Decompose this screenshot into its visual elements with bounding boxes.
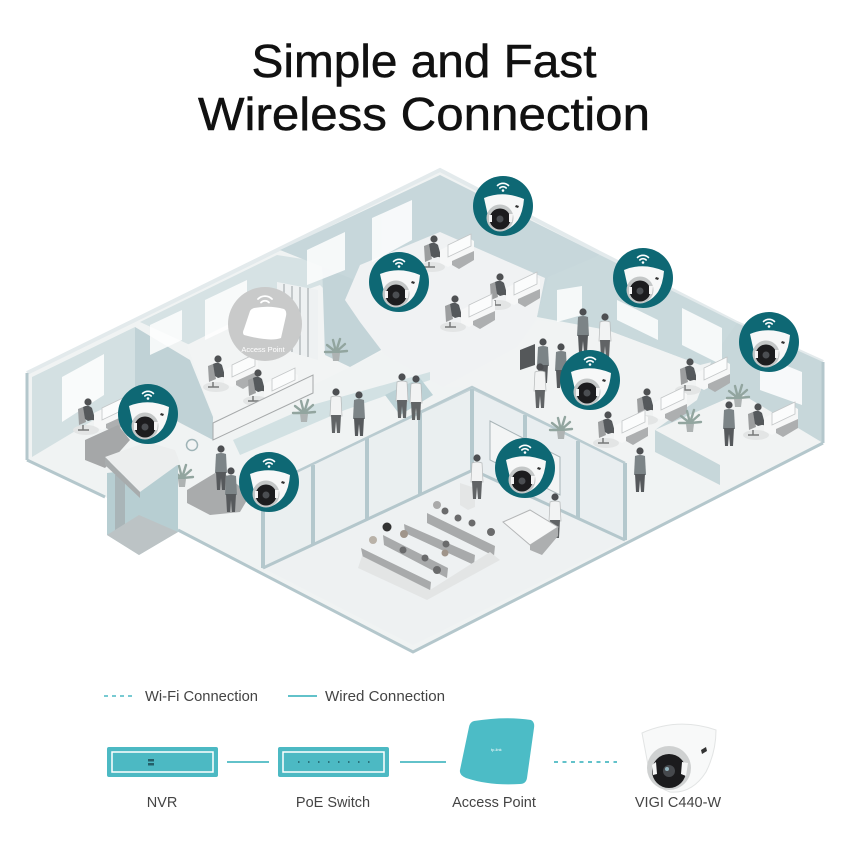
connector: [227, 761, 269, 763]
top room window right: [372, 200, 412, 262]
conference room top rail: [263, 387, 625, 488]
whiteboard: [557, 286, 582, 322]
network diagram: [107, 718, 721, 811]
device labels: NVR: [147, 795, 177, 811]
middle-right room back wall: [537, 255, 737, 365]
middle room workers: [675, 357, 730, 395]
right room floor: [655, 393, 821, 490]
group person 3: [577, 308, 589, 353]
device labels: Access Point: [452, 795, 536, 811]
group woman: [534, 363, 546, 408]
middle-right room floor: [443, 320, 700, 463]
access point device: [460, 718, 534, 784]
audience shadow: [358, 552, 500, 600]
plant: [171, 465, 193, 487]
plant: [550, 417, 572, 439]
elevator post: [115, 475, 125, 541]
person: [353, 391, 365, 436]
NVR: [107, 747, 218, 777]
bench row 3: [404, 524, 475, 565]
front desk with teacher: [503, 493, 561, 555]
room A partition wall: [135, 327, 213, 440]
elevator top side: [105, 457, 140, 498]
access point room floor: [187, 285, 385, 420]
walking man: [634, 447, 646, 492]
wall clock: [186, 440, 198, 450]
conference benches: [361, 513, 495, 592]
right room window: [760, 355, 802, 405]
device labels: PoE Switch: [296, 795, 370, 811]
outer floor edge: [27, 362, 823, 652]
AP label: Access Point: [241, 345, 286, 354]
right room seated worker: [743, 402, 798, 440]
camera badge 1: [473, 176, 533, 236]
middle room window far: [682, 308, 722, 365]
AP room workers: [203, 354, 258, 392]
isometric office floor plan: [27, 170, 823, 652]
elevator: [105, 442, 180, 555]
bench row 4: [427, 513, 495, 556]
left room manager: [73, 397, 128, 435]
corridor glass wall: [233, 372, 430, 455]
title: Simple and Fast: [252, 35, 597, 87]
conference whiteboard: [490, 421, 560, 495]
presenter: [471, 454, 483, 499]
PoE switch: [278, 747, 389, 777]
left room desk: [85, 425, 130, 468]
top room worker 2: [485, 272, 540, 310]
standing people: [330, 388, 342, 433]
left room window: [62, 354, 104, 422]
middle room window: [617, 300, 658, 340]
ap wifi waves: [258, 296, 272, 302]
conference room left wall: [263, 389, 473, 568]
camera badge 8: [495, 438, 555, 498]
elevator glass: [107, 465, 178, 555]
elevator top: [105, 442, 180, 492]
plant: [679, 410, 701, 432]
group person: [537, 338, 549, 383]
top room window left: [307, 232, 345, 285]
AP room worker 2: [243, 368, 298, 406]
group person 2: [555, 343, 567, 388]
access point device: tp-link: [491, 747, 502, 752]
camera badges: [118, 176, 799, 512]
workers and furniture: [73, 234, 798, 515]
elevator base: [107, 515, 178, 555]
wifi legend line: [104, 695, 134, 697]
room B window right: [205, 280, 247, 340]
windows: [62, 200, 802, 422]
lounge person: [396, 373, 408, 418]
shelves: [277, 282, 318, 360]
podium: [460, 483, 475, 510]
top room floor: [345, 232, 545, 387]
camera badge 3: [613, 248, 673, 308]
copier: [520, 344, 535, 370]
visitor: [225, 467, 237, 512]
wifi legend label: Wi-Fi Connection: [145, 689, 258, 705]
plants: [325, 339, 347, 361]
access point room back wall: [140, 255, 325, 345]
wired legend line: [288, 695, 317, 697]
top room worker 3: [440, 294, 495, 332]
access point badge: [228, 287, 302, 361]
lounge seats: [385, 378, 433, 415]
camera badge 5: [560, 350, 620, 410]
wall posts: [263, 389, 625, 568]
conference room floor: [263, 470, 625, 645]
title: [198, 35, 650, 140]
right room low wall: [655, 430, 720, 485]
camera badge 7: [239, 452, 299, 512]
plant: [727, 385, 749, 407]
bench row 2: [383, 535, 448, 578]
bench row 1: [361, 548, 431, 592]
ap device: [243, 307, 286, 339]
middle room worker 3: [593, 410, 648, 448]
outer wall cap: [27, 170, 823, 373]
lounge person 2: [410, 375, 422, 420]
conference room right wall: [472, 389, 625, 540]
receptionist: [215, 445, 227, 490]
top room worker 1: [419, 234, 474, 272]
wired legend label: Wired Connection: [325, 689, 445, 705]
device labels: VIGI C440-W: [635, 795, 721, 811]
right room standing man: [723, 401, 735, 446]
right room back wall: [655, 323, 823, 443]
camera badge 2: [369, 252, 429, 312]
plant: [293, 400, 315, 422]
title: Wireless Connection: [198, 88, 650, 140]
camera badge 4: [739, 312, 799, 372]
group person 4: [599, 313, 611, 358]
left room back wall: [32, 327, 135, 457]
audience heads: [369, 501, 495, 574]
room B window left: [150, 310, 182, 355]
reception counter: [187, 470, 250, 515]
wifi connector: [554, 761, 617, 763]
middle room worker 2: [632, 387, 687, 425]
device labels: [147, 795, 721, 811]
legend: [104, 689, 445, 705]
VIGI camera: [642, 724, 716, 792]
building footprint: [27, 170, 823, 652]
blue partition box: [322, 262, 382, 367]
lobby partition: [213, 375, 313, 440]
connector: [400, 761, 446, 763]
camera badge 6: [118, 384, 178, 444]
top room back wall: [280, 175, 600, 317]
